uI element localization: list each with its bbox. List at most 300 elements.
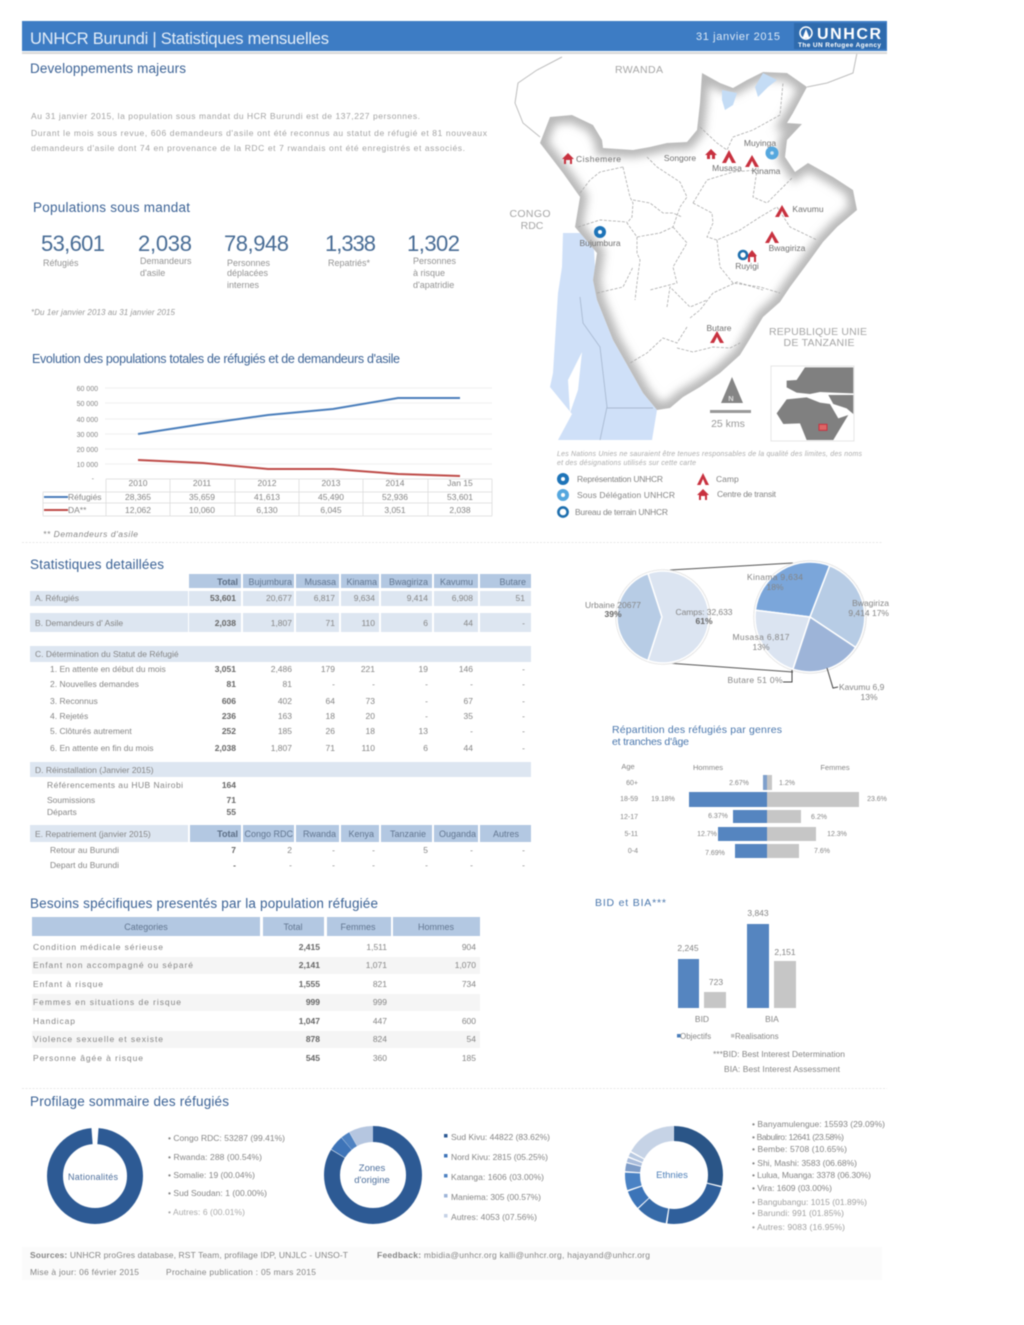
stat: returnees: [325, 231, 376, 268]
place names: [576, 138, 824, 333]
table rows: Femmes en situations de risque: [33, 997, 181, 1007]
section E: repatriation: Tanzanie: [390, 829, 426, 839]
footer band: [22, 1247, 882, 1280]
section E: repatriation: 7: [231, 845, 236, 855]
section E: repatriation: -: [289, 860, 292, 870]
section E: repatriation: 2: [287, 845, 292, 855]
UNHCR logo: [794, 23, 886, 49]
stat: IDPs: [224, 231, 289, 290]
table rows: 600: [462, 1016, 476, 1026]
abbreviations note: [713, 1049, 845, 1074]
update date: Mise à jour: 06 février 2015: [30, 1267, 139, 1277]
section C: refugee status determination: -: [425, 711, 428, 721]
table header: Kavumu: [440, 577, 473, 587]
place names: Musasa: [712, 163, 742, 173]
pyramid labels: 0-4: [628, 848, 638, 855]
place names: Kavumu: [792, 204, 824, 214]
section C: refugee status determination: 110: [361, 743, 375, 753]
pyramid labels: 5-11: [624, 831, 638, 838]
place names: Bujumbura: [579, 238, 621, 248]
data table: 2013: [322, 478, 341, 488]
value labels: [677, 908, 796, 1024]
north arrow and scale: [710, 377, 751, 430]
value labels: 2,151: [774, 947, 796, 957]
pie labels: Kavumu 6,9: [839, 682, 885, 692]
section D: resettlement: Départs: [47, 807, 77, 817]
section C: refugee status determination: C. Détermination du Statut de Réfugié: [35, 649, 179, 659]
section E: repatriation: -: [425, 860, 428, 870]
section C: refugee status determination: 64: [326, 696, 335, 706]
gridlines and axis: 20 000: [77, 447, 98, 454]
row B: asylum seekers: -: [522, 618, 525, 628]
pie labels: 39%: [604, 609, 622, 619]
data table: 6,130: [256, 505, 278, 515]
table rows: 360: [373, 1053, 387, 1063]
row B: asylum seekers: 1,807: [271, 618, 292, 628]
section C: refugee status determination: -: [522, 711, 525, 721]
data table: 3,051: [384, 505, 406, 515]
row A: refugees: 20,677: [266, 593, 292, 603]
section C: refugee status determination: 67: [464, 696, 473, 706]
body text: Au 31 janvier 2015, la population sous mandat du HCR Burundi est de 137,227 personnes.: [31, 111, 420, 121]
row A: refugees: [30, 591, 531, 606]
section E: repatriation: [30, 825, 531, 870]
left pie: [616, 570, 710, 664]
map legend: Camp: [716, 474, 739, 484]
map legend: Sous Délégation UNHCR: [577, 490, 675, 500]
section C: refugee status determination: -: [470, 726, 473, 736]
pie labels: Butare 51 0%: [728, 675, 783, 685]
table header: Musasa: [304, 577, 336, 587]
pyramid labels: 7.6%: [814, 848, 830, 855]
section C: refugee status determination: 6: [423, 743, 428, 753]
row B: asylum seekers: 110: [361, 618, 375, 628]
pie labels: [585, 572, 889, 702]
stat: IDPs: internes: [227, 280, 260, 290]
report date: 31 janvier 2015: [696, 31, 780, 43]
right pie: [754, 561, 866, 673]
table rows: 2,141: [299, 960, 320, 970]
row A: refugees: 51: [516, 593, 525, 603]
section E: repatriation: -: [522, 845, 525, 855]
place names: Ruyigi: [735, 261, 759, 271]
pyramid labels: 2.67%: [729, 780, 749, 787]
data table: 2011: [193, 478, 211, 488]
section C: refugee status determination: -: [372, 679, 375, 689]
section C: refugee status determination: 19: [419, 664, 428, 674]
gridlines and axis: [77, 386, 492, 483]
panel: populations under mandate: [31, 200, 460, 317]
table rows: 878: [306, 1034, 320, 1044]
legend: nationalities: [168, 1133, 285, 1217]
data table: 28,365: [125, 492, 151, 502]
chart: BID and BIA bars: [595, 897, 845, 1074]
table header: Kinama: [346, 577, 377, 587]
pyramid labels: 19.18%: [651, 796, 675, 803]
Burundi territory with shaded edge: [540, 72, 857, 410]
section C: refugee status determination: 2. Nouvelles demandes: [50, 679, 139, 689]
table rows: 904: [462, 942, 476, 952]
stat: refugees: [41, 231, 105, 268]
inset locator map: [771, 366, 854, 441]
stat: IDPs: Personnes: [227, 258, 271, 268]
country labels: DE TANZANIE: [784, 337, 854, 349]
asylum seeker line: [138, 460, 460, 476]
pie labels: Bwagiriza: [852, 598, 889, 608]
table header: Bujumbura: [248, 577, 292, 587]
section D: resettlement: Référencements au HUB Nairobi: [47, 780, 183, 790]
section C: refugee status determination: 402: [278, 696, 292, 706]
donut: zones of origin: Zones: [359, 1163, 385, 1174]
pie labels: 9,414 17%: [848, 608, 889, 618]
section C: refugee status determination: 2,486: [271, 664, 292, 674]
data table: 53,601: [447, 492, 473, 502]
stat: IDPs: 78,948: [224, 231, 289, 256]
sources: Sources: UNHCR proGres database, RST Team, profilage IDP, UNJLC - UNSO-T: [30, 1250, 348, 1260]
map disclaimer: Les Nations Unies ne sauraient être tenues responsables de la qualité des limites, des noms: [557, 451, 862, 458]
table rows: Enfant à risque: [33, 979, 103, 989]
table rows: Violence sexuelle et sexiste: [33, 1034, 163, 1044]
section E: repatriation: Rwanda: [303, 829, 336, 839]
section C: refugee status determination: 3. Reconnus: [50, 696, 98, 706]
body text: [31, 111, 488, 153]
pyramid labels: Femmes: [820, 763, 850, 772]
row B: asylum seekers: B. Demandeurs d' Asile: [35, 618, 123, 628]
table rows: 1,071: [366, 960, 387, 970]
legend: [677, 1032, 779, 1041]
map legend: Centre de transit: [717, 489, 777, 499]
section C: refugee status determination: 81: [227, 679, 236, 689]
feedback: Feedback: mbidia@unhcr.org kalli@unhcr.org, hajayand@unhcr.org: [377, 1250, 650, 1260]
section C: refugee status determination: [30, 646, 531, 753]
pyramid labels: 1.2%: [779, 780, 795, 787]
pie labels: Kinama 9,634: [747, 572, 803, 582]
legend: nationalities: • Rwanda: 288 (00.54%): [168, 1152, 262, 1162]
pie labels: Urbaine 20677: [585, 600, 641, 610]
table header: Categories: [124, 922, 168, 932]
section C: refugee status determination: 221: [361, 664, 375, 674]
pyramid labels: 60+: [626, 780, 638, 787]
section E: repatriation: Ouganda: [439, 829, 476, 839]
pyramid labels: 12.3%: [827, 831, 847, 838]
section E: repatriation: -: [372, 860, 375, 870]
place names: Muyinga: [744, 138, 776, 148]
pie labels: 13%: [860, 692, 878, 702]
row A: refugees: 9,414: [407, 593, 428, 603]
data table: 45,490: [318, 492, 344, 502]
female bars: [767, 775, 859, 858]
row B: asylum seekers: 2,038: [215, 618, 236, 628]
map legend: [557, 473, 777, 517]
donut: nationalities: [55, 1136, 135, 1216]
stat: stateless: Personnes: [413, 256, 457, 266]
table rows: 999: [373, 997, 387, 1007]
table rows: 1,047: [299, 1016, 320, 1026]
alternate row stripes: [32, 957, 480, 1048]
icons: UNHCR offices: [594, 146, 778, 259]
pie labels: 18%: [766, 582, 784, 592]
section E: repatriation: -: [233, 860, 236, 870]
legend: Objectifs: [680, 1032, 711, 1041]
icons: camps: [710, 150, 789, 343]
legend: ethnicities: • Banyamulengue: 15593 (29.09%): [752, 1119, 885, 1129]
panel: refugee profile: [30, 1094, 885, 1232]
table rows: 1,070: [455, 960, 476, 970]
donut: ethnicities: Ethnies: [656, 1170, 688, 1181]
gridlines and axis: 50 000: [77, 401, 98, 408]
donut: ethnicities: [632, 1134, 716, 1216]
chart: refugees by camp and urban pie of pie: [585, 561, 889, 702]
table rows: 824: [373, 1034, 387, 1044]
legend: ethnicities: [752, 1119, 885, 1232]
section E: repatriation: Retour au Burundi: [50, 845, 119, 855]
stat: stateless: 1,302: [407, 231, 460, 256]
table footnote: ** Demandeurs d'asile: [43, 529, 138, 539]
pie labels: 13%: [752, 642, 770, 652]
legend: ethnicities: • Vira: 1609 (03.00%): [752, 1183, 832, 1193]
value labels: 723: [709, 977, 723, 987]
table rows: Personne âgée à risque: [33, 1053, 143, 1063]
row A: refugees: 9,634: [354, 593, 375, 603]
section C: refugee status determination: 26: [326, 726, 335, 736]
icons: transit centres: [562, 149, 757, 262]
section D: resettlement: D. Réinstallation (Janvier 2015): [35, 765, 154, 775]
gridlines and axis: 60 000: [77, 386, 98, 393]
north arrow and scale: N: [728, 394, 734, 403]
place names: Bwagiriza: [769, 243, 806, 253]
data table: 2012: [258, 478, 277, 488]
gridlines and axis: 30 000: [77, 432, 98, 439]
heading: Statistiques detaillées: [30, 557, 164, 572]
leader lines: [783, 668, 838, 688]
table header: Total: [217, 577, 238, 587]
section E: repatriation: -: [332, 845, 335, 855]
section C: refugee status determination: 18: [326, 711, 335, 721]
section C: refugee status determination: 2,038: [215, 743, 236, 753]
stat: asylum seekers: Demandeurs: [140, 256, 192, 266]
section C: refugee status determination: 4. Rejetés: [50, 711, 88, 721]
country labels: RWANDA: [615, 64, 663, 76]
pie labels: Camps: 32,633: [676, 607, 733, 617]
header band: [22, 21, 887, 54]
heading: Besoins spécifiques presentés par la population réfugiée: [30, 896, 378, 911]
legend: ethnicities: • Bangubangu: 1015 (01.89%): [752, 1197, 867, 1207]
table header: Butare: [499, 577, 526, 587]
row B: asylum seekers: [30, 613, 531, 632]
table header: Femmes: [340, 922, 376, 932]
data table: 52,936: [382, 492, 408, 502]
section C: refugee status determination: 5. Clôturés autrement: [50, 726, 132, 736]
report title: UNHCR Burundi | Statistiques mensuelles: [30, 30, 329, 48]
pyramid labels: 12-17: [620, 814, 638, 821]
data table: Jan 15: [447, 478, 473, 488]
stat: stateless: à risque: [413, 268, 445, 278]
section D: resettlement: 55: [227, 807, 236, 817]
next publication: Prochaine publication : 05 mars 2015: [166, 1267, 316, 1277]
male bars: [689, 775, 767, 858]
body text: Durant le mois sous revue, 606 demandeurs d'asile ont été reconnus au statut de réfugié et 81 nouveaux: [31, 128, 488, 138]
section C: refugee status determination: 606: [222, 696, 236, 706]
pyramid labels: Age: [621, 762, 635, 771]
pyramid labels: 7.69%: [705, 850, 725, 857]
table rows: 734: [462, 979, 476, 989]
lake Tanganyika: [550, 233, 657, 440]
table rows: 54: [467, 1034, 476, 1044]
table header: [32, 917, 480, 936]
pie labels: Musasa 6,817: [732, 632, 790, 642]
north arrow and scale: 25 kms: [711, 418, 745, 430]
abbreviations note: ***BID: Best Interest Determination: [713, 1049, 845, 1059]
legend: ethnicities: • Bembe: 5708 (10.65%): [752, 1144, 847, 1154]
section C: refugee status determination: -: [522, 743, 525, 753]
row A: refugees: 6,908: [452, 593, 473, 603]
section C: refugee status determination: -: [425, 696, 428, 706]
pyramid labels: 12.7%: [697, 831, 717, 838]
footnote: *Du 1er janvier 2013 au 31 janvier 2015: [31, 308, 176, 317]
section C: refugee status determination: 146: [459, 664, 473, 674]
data table: 2014: [386, 478, 405, 488]
table header: Hommes: [418, 922, 454, 932]
table rows: Enfant non accompagné ou séparé: [33, 960, 193, 970]
stat: refugees: 53,601: [41, 231, 105, 256]
section D: resettlement: [30, 762, 531, 817]
donut: zones of origin: [332, 1134, 414, 1216]
legend: nationalities: • Somalie: 19 (00.04%): [168, 1170, 255, 1180]
table rows: 1,511: [366, 942, 387, 952]
gridlines and axis: 10 000: [77, 462, 98, 469]
table header: [189, 574, 531, 588]
small northern lakes: [722, 73, 777, 110]
table rows: 821: [373, 979, 387, 989]
section E: repatriation: -: [470, 845, 473, 855]
table rows: 545: [306, 1053, 320, 1063]
section E: repatriation: -: [522, 860, 525, 870]
panel: map of Burundi: [510, 53, 867, 517]
data table: Réfugiés: [68, 492, 102, 502]
gridlines and axis: -: [92, 476, 95, 483]
province boundaries: [578, 83, 817, 363]
table rows: [33, 942, 476, 1063]
data table: 2010: [129, 478, 148, 488]
section C: refugee status determination: 81: [283, 679, 292, 689]
data table: 41,613: [254, 492, 280, 502]
row B: asylum seekers: 44: [464, 618, 473, 628]
stat: asylum seekers: 2,038: [138, 231, 192, 256]
section E: repatriation: Total: [217, 829, 238, 839]
section C: refugee status determination: 44: [464, 743, 473, 753]
chart: age and gender pyramid: [612, 724, 887, 858]
row A: refugees: A. Réfugiés: [35, 593, 79, 603]
section C: refugee status determination: 1. En attente en début du mois: [50, 664, 166, 674]
place names: Kinama: [752, 166, 781, 176]
row A: refugees: 53,601: [210, 593, 236, 603]
section E: repatriation: 5: [423, 845, 428, 855]
section C: refugee status determination: 252: [222, 726, 236, 736]
section D: resettlement: 164: [222, 780, 236, 790]
panel: specific needs table: [30, 896, 480, 1063]
pyramid labels: Hommes: [693, 763, 723, 772]
section C: refugee status determination: 6. En attente en fin du mois: [50, 743, 153, 753]
stat: stateless: [407, 231, 460, 290]
heading: Populations sous mandat: [33, 200, 190, 215]
heading: Répartition des réfugiés par genres: [612, 724, 782, 736]
place names: Cishemere: [576, 154, 621, 164]
map disclaimer: [557, 451, 862, 467]
connector lines: [667, 563, 793, 672]
legend: nationalities: • Congo RDC: 53287 (99.41%): [168, 1133, 285, 1143]
legend: ethnicities: • Autres: 9083 (16.95%): [752, 1222, 845, 1232]
body text: demandeurs d'asile dont 74 en provenance de la RDC et 7 rwandais ont été enregistrés et associés.: [31, 143, 465, 153]
section C: refugee status determination: 163: [278, 711, 292, 721]
stat: refugees: Réfugiés: [43, 258, 79, 268]
section C: refugee status determination: 18: [366, 726, 375, 736]
value labels: 3,843: [747, 908, 769, 918]
stat: asylum seekers: [138, 231, 192, 278]
section D: resettlement: Soumissions: [47, 795, 95, 805]
stat: asylum seekers: d'asile: [140, 268, 165, 278]
stat: returnees: Repatriés*: [328, 258, 371, 268]
section C: refugee status determination: 1,807: [271, 743, 292, 753]
section C: refugee status determination: 3,051: [215, 664, 236, 674]
section C: refugee status determination: -: [522, 664, 525, 674]
section C: refugee status determination: -: [332, 679, 335, 689]
section D: resettlement: 71: [227, 795, 236, 805]
section E: repatriation: -: [470, 860, 473, 870]
table header: Total: [283, 922, 303, 932]
section E: repatriation: Depart du Burundi: [50, 860, 119, 870]
value labels: 2,245: [677, 943, 699, 953]
map legend: Représentation UNHCR: [577, 474, 663, 484]
place names: Songore: [664, 153, 696, 163]
country labels: [510, 64, 867, 349]
legend: zones of origin: Autres: 4053 (07.56%): [451, 1212, 537, 1222]
section E: repatriation: Congo RDC: [244, 829, 293, 839]
legend: nationalities: • Sud Soudan: 1 (00.00%): [168, 1188, 267, 1198]
table rows: 185: [462, 1053, 476, 1063]
data table: 12,062: [125, 505, 151, 515]
table rows: Condition médicale sérieuse: [33, 942, 163, 952]
section C: refugee status determination: 13: [419, 726, 428, 736]
value labels: BIA: [765, 1014, 779, 1024]
section C: refugee status determination: 236: [222, 711, 236, 721]
country labels: CONGO: [510, 208, 550, 220]
table rows: 999: [306, 997, 320, 1007]
stat: returnees: 1,338: [325, 231, 376, 256]
row B: asylum seekers: 71: [326, 618, 335, 628]
country labels: REPUBLIQUE UNIE: [769, 326, 867, 338]
legend: ethnicities: • Barundi: 991 (01.85%): [752, 1208, 844, 1218]
legend: zones of origin: Sud Kivu: 44822 (83.62%): [451, 1132, 550, 1142]
legend: zones of origin: Maniema: 305 (00.57%): [451, 1192, 541, 1202]
bars: [678, 924, 796, 1008]
pyramid labels: 23.6%: [867, 796, 887, 803]
panel: detailed statistics table: [30, 557, 531, 870]
section E: repatriation: E. Repatriement (janvier 2015): [35, 829, 151, 839]
section C: refugee status determination: 35: [464, 711, 473, 721]
legend: ethnicities: • Babuliro: 12641 (23.58%): [752, 1132, 844, 1142]
UNHCR logo: The UN Refugee Agency: [798, 42, 881, 49]
map disclaimer: et des désignations utilisés sur cette carte: [557, 460, 696, 467]
legend: zones of origin: Katanga: 1606 (03.00%): [451, 1172, 544, 1182]
refugee line: [138, 398, 460, 434]
section C: refugee status determination: -: [470, 679, 473, 689]
legend: ethnicities: • Shi, Mashi: 3583 (06.68%): [752, 1158, 857, 1168]
donut: nationalities: Nationalités: [68, 1172, 118, 1182]
legend: ethnicities: • Lulua, Muanga: 3378 (06.30%): [752, 1170, 871, 1180]
section E: repatriation: Kenya: [348, 829, 374, 839]
table rows: 1,555: [299, 979, 320, 989]
pyramid labels: [620, 762, 887, 857]
